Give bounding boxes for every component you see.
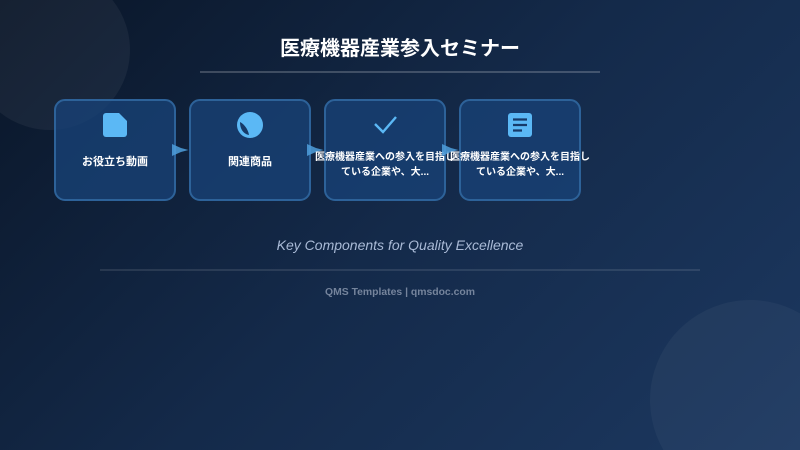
icon: check mark [375, 117, 396, 132]
subtitle: Key Components for Quality Excellence [277, 237, 524, 253]
panel: 関連商品 [190, 100, 310, 200]
title: 医療機器産業参入セミナー [280, 37, 520, 60]
footer: QMS Templates | qmsdoc.com [325, 287, 475, 298]
panel: 参入を目指す企業 2 [450, 100, 590, 200]
panel: 参入を目指す企業 2: ている企業や、大... [476, 165, 564, 178]
icon: document [103, 113, 127, 137]
arrow 2 [307, 144, 324, 156]
panel: 参入を目指す企業 1 [315, 100, 455, 200]
panel: 参入を目指す企業 1: ている企業や、大... [341, 165, 429, 178]
label: お役立ち動画: お役立ち動画 [82, 154, 148, 168]
label: 関連商品: 関連商品 [228, 154, 272, 168]
icon: article [508, 113, 532, 137]
arrow 1 [172, 144, 188, 156]
icon: leaf circle [237, 112, 263, 138]
panel: お役立ち動画 [55, 100, 175, 200]
description text: 医療機器産業への参入を目指し [315, 150, 455, 163]
arrow 3 [442, 144, 458, 156]
description text: 医療機器産業への参入を目指し [450, 150, 590, 163]
